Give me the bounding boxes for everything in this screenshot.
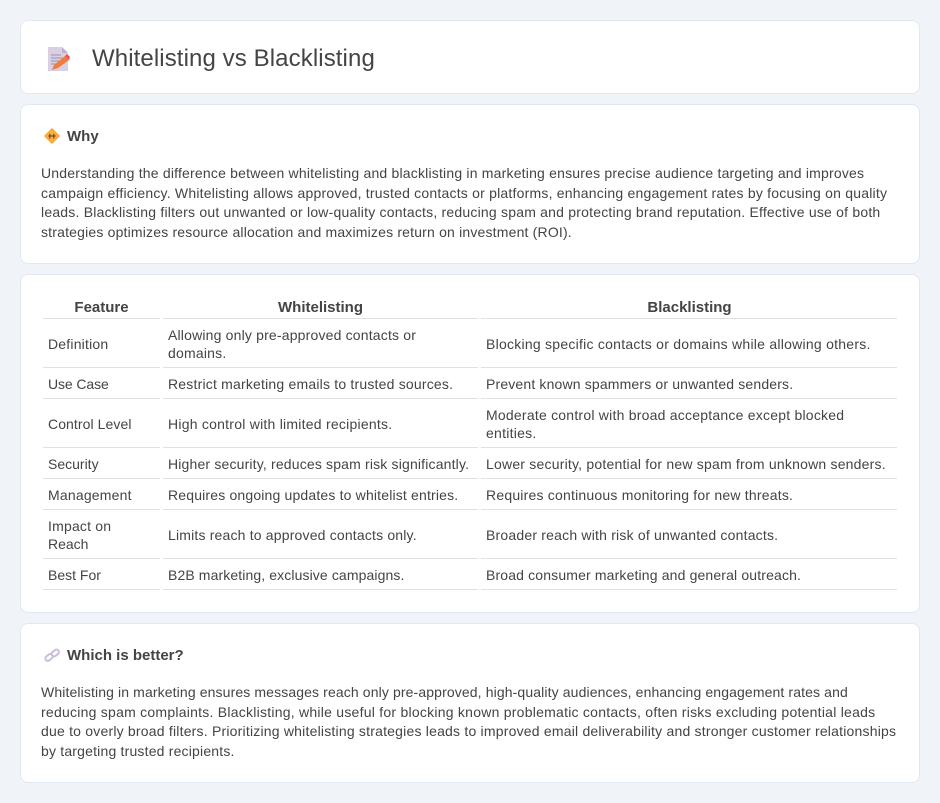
row: use case: Restrict marketing emails to trusted sources. (168, 376, 453, 392)
row: management: Management (48, 487, 132, 503)
row: security: Lower security, potential for new spam from unknown senders. (486, 456, 886, 472)
row: definition: domains. (168, 345, 226, 361)
row: impact on reach: Limits reach to approved contacts only. (168, 527, 417, 543)
row: use case: Use Case (48, 376, 109, 392)
text block: why (41, 165, 887, 240)
title: Whitelisting vs Blacklisting (92, 45, 375, 72)
row: use case: Prevent known spammers or unwanted senders. (486, 376, 793, 392)
row: management (48, 487, 793, 503)
row: control level: entities. (486, 425, 536, 441)
row: control level: Control Level (48, 416, 132, 432)
text block: which is better (41, 684, 896, 759)
table header row: Feature (74, 299, 129, 316)
row: use case (48, 376, 793, 392)
row: impact on reach: Broader reach with risk of unwanted contacts. (486, 527, 778, 543)
row: definition: Definition (48, 336, 108, 352)
table header row: Blacklisting (647, 299, 732, 316)
table header row (74, 299, 732, 316)
row: impact on reach (48, 518, 778, 552)
icon: chain link (44, 648, 60, 662)
heading: which is better: Which is better? (67, 647, 184, 664)
row: control level: Moderate control with broad acceptance except blocked (486, 407, 844, 423)
panel: header (20, 20, 920, 94)
text block: which is better: by targeting trusted recipients. (41, 743, 235, 759)
text block: which is better: Whitelisting in marketing ensures messages reach only pre-approved, high-quality audiences, enhancing engagement rates and (41, 684, 848, 700)
row: definition: Allowing only pre-approved contacts or (168, 327, 416, 343)
row: control level (48, 407, 844, 441)
text block: why: campaign efficiency. Whitelisting allows approved, trusted contacts or platforms, enhancing engagement rates by focusing on quality (41, 185, 887, 201)
row: definition: Blocking specific contacts or domains while allowing others. (486, 336, 871, 352)
text block: which is better: reducing spam complaints. Blacklisting, while useful for blocking known problematic contacts, often risks excluding potential leads (41, 704, 875, 720)
text block: which is better: due to overly broad filters. Prioritizing whitelisting strategies leads to improved email deliverability and stronger customer relationships (41, 723, 896, 739)
row: security (48, 456, 886, 472)
panel: comparison table (20, 274, 920, 613)
icon: warning diamond (44, 128, 60, 144)
row: best for: B2B marketing, exclusive campaigns. (168, 567, 405, 583)
row: impact on reach: Impact on (48, 518, 111, 534)
text block: why: Understanding the difference between whitelisting and blacklisting in marketing ensures precise audience targeting and improves (41, 165, 864, 181)
row: management: Requires continuous monitoring for new threats. (486, 487, 793, 503)
panel: why (20, 104, 920, 264)
row: control level: High control with limited recipients. (168, 416, 392, 432)
row: definition (48, 327, 871, 361)
panel: which is better (20, 623, 920, 783)
text block: why: strategies optimizes resource allocation and maximizes return on investment (ROI). (41, 224, 572, 240)
heading: why: Why (67, 128, 99, 145)
row: security: Security (48, 456, 99, 472)
row: impact on reach: Reach (48, 536, 88, 552)
row: security: Higher security, reduces spam risk significantly. (168, 456, 469, 472)
row: best for (48, 567, 801, 583)
row: best for: Broad consumer marketing and general outreach. (486, 567, 801, 583)
table header row: Whitelisting (278, 299, 363, 316)
row: best for: Best For (48, 567, 101, 583)
icon: memo with pencil (48, 47, 70, 71)
row: management: Requires ongoing updates to whitelist entries. (168, 487, 458, 503)
text block: why: leads. Blacklisting filters out unwanted or low-quality contacts, reducing spam and protecting brand reputation. Effective use of both (41, 204, 880, 220)
